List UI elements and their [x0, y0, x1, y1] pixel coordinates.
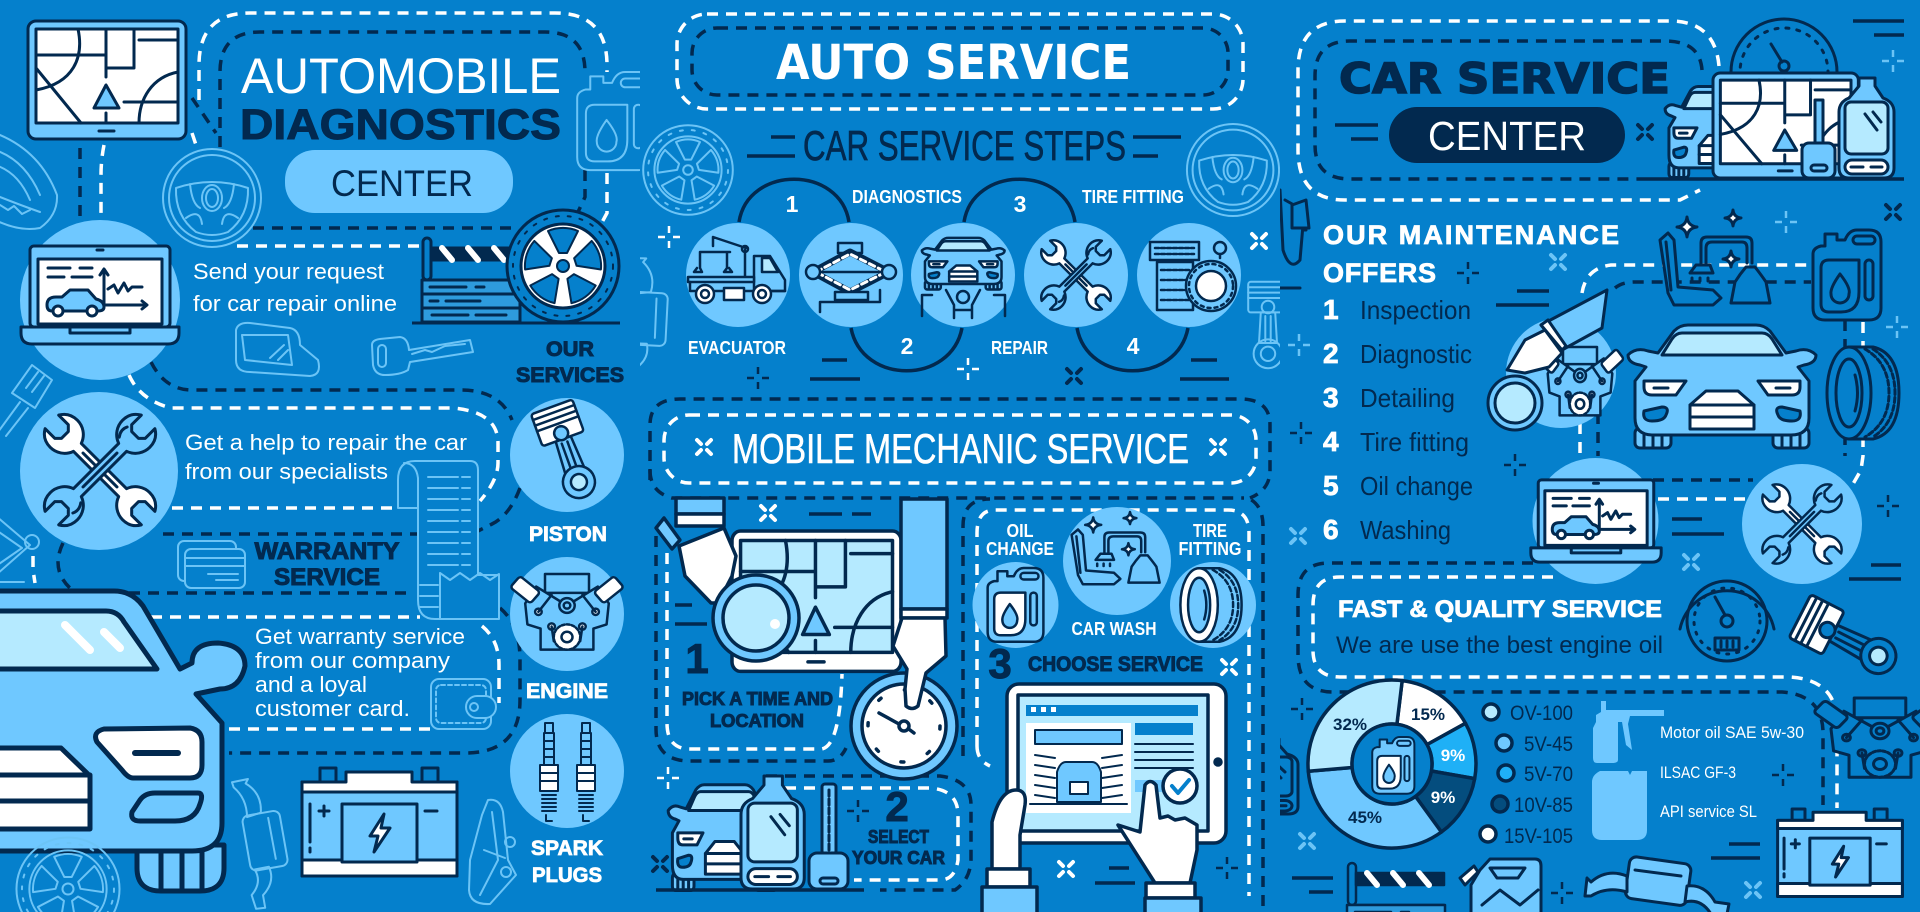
title: car service: CAR SERVICE — [1339, 54, 1670, 103]
icon: tire — [1827, 347, 1899, 439]
service: spark plugs: SPARK — [531, 837, 603, 860]
slice 15% — [1397, 681, 1466, 745]
title frame — [1298, 21, 1719, 200]
item 4: 4 — [1323, 426, 1339, 457]
option: oil change: CHANGE — [986, 539, 1054, 559]
step icon: tow truck — [686, 223, 790, 327]
title: auto service: AUTO SERVICE — [776, 35, 1131, 91]
item 2: 2 — [1323, 338, 1339, 369]
service: engine — [510, 557, 624, 703]
icon: receipt — [398, 461, 499, 619]
item 2: Diagnostic — [1360, 339, 1472, 369]
step 3 illustration: tablet and hands — [982, 684, 1226, 912]
outline steering wheel — [1187, 124, 1279, 216]
option: tire fitting: FITTING — [1178, 539, 1242, 559]
legend 10V-85 — [1492, 794, 1573, 817]
icon: fuel nozzle — [1280, 190, 1309, 288]
icon: car key outline — [372, 337, 473, 375]
legend 5V-45 — [1496, 733, 1573, 756]
item 3 — [1323, 382, 1455, 413]
icon: key outline left — [0, 365, 52, 436]
step 1 label: LOCATION — [710, 711, 804, 731]
item 1: Inspection — [1360, 295, 1471, 325]
lower dashed routes — [656, 498, 1263, 906]
value labels: 45% — [1348, 808, 1382, 827]
step 2 label: 2 — [885, 783, 909, 830]
icon: engine — [1813, 698, 1920, 777]
legend 15V-105: 15V-105 — [1504, 825, 1573, 848]
icon: battery — [1778, 809, 1902, 896]
icon: seat wash — [1660, 210, 1770, 305]
step 3 label: 3 — [988, 640, 1012, 687]
service: spark plugs: PLUGS — [532, 864, 602, 887]
heading: mobile mechanic service: MOBILE MECHANIC SERVICE — [732, 425, 1189, 472]
icon: oil can — [1593, 701, 1664, 763]
legend 5V-70 — [1498, 763, 1573, 786]
text: send request — [193, 259, 397, 316]
hand with magnifier — [656, 498, 799, 661]
value labels: 9% — [1441, 746, 1465, 765]
step connector arcs — [739, 179, 1188, 371]
text: oil specs: API service SL — [1660, 802, 1757, 821]
center pill — [285, 150, 513, 213]
text: warranty details: Get warranty service — [255, 624, 465, 649]
service: spark plugs — [510, 714, 624, 887]
clock — [851, 673, 957, 779]
step numbers — [786, 191, 1140, 359]
icon: piston — [1789, 594, 1905, 686]
legend — [1480, 702, 1573, 848]
icon cluster: gauge, car, tablet, device — [1637, 19, 1904, 179]
step 2 label — [852, 783, 945, 868]
step labels: EVACUATOR — [688, 338, 786, 358]
icon: wrenches circle — [20, 392, 178, 550]
icon: battery — [302, 768, 457, 876]
item 5: Oil change — [1360, 471, 1473, 501]
text: repair help: from our specialists — [185, 459, 388, 484]
legend 5V-70: 5V-70 — [1524, 763, 1573, 786]
step 1 illustration: tablet and hands — [656, 498, 957, 779]
outline muffler — [640, 257, 669, 366]
icon: alloy wheel outline — [16, 837, 120, 912]
heading: automobile: AUTOMOBILE — [241, 48, 561, 104]
icon: laptop circle — [1531, 458, 1661, 584]
service: piston — [510, 398, 624, 546]
value labels: 32% — [1333, 715, 1367, 734]
slice 9% dark — [1416, 771, 1475, 832]
panel: auto service — [616, 0, 1288, 912]
step 2 label: YOUR CAR — [852, 848, 945, 868]
donut chart — [1308, 680, 1476, 848]
icon: oil jug — [1592, 771, 1647, 840]
item 1: 1 — [1323, 294, 1339, 325]
step labels — [688, 187, 1184, 358]
icon: device partial — [1243, 739, 1298, 814]
list: maintenance offers — [1323, 294, 1473, 545]
heading: warranty service — [254, 542, 400, 586]
icon: jack outline — [0, 516, 39, 582]
icon: ramp — [1347, 863, 1445, 912]
option: car wash — [1063, 507, 1171, 639]
step 2 label: SELECT — [868, 827, 929, 847]
heading: car service steps — [747, 130, 1181, 161]
item 6 — [1323, 514, 1451, 545]
text: repair help — [185, 430, 467, 484]
text: warranty details — [255, 624, 465, 721]
text: send request: Send your request — [193, 259, 384, 284]
heading: our services — [516, 341, 624, 382]
step icon: tire stack — [1137, 223, 1241, 327]
text: oil specs: Motor oil SAE 5w-30 — [1660, 723, 1804, 742]
value labels — [1333, 705, 1465, 827]
service tablet — [1007, 684, 1226, 843]
text: send request: for car repair online — [193, 291, 397, 316]
speed lines — [1335, 125, 1378, 139]
mobile mechanic frame — [650, 399, 1270, 498]
value labels: 15% — [1411, 705, 1445, 724]
icon: wrenches circle — [1742, 464, 1862, 584]
step numbers: 2 — [901, 333, 913, 359]
legend OV-100 — [1483, 702, 1573, 725]
title frame — [677, 14, 1243, 109]
step numbers: 3 — [1014, 191, 1026, 217]
item 1 — [1323, 294, 1471, 325]
icon: side mirror outline — [236, 323, 319, 376]
slice 45% — [1308, 768, 1441, 848]
icon: ramp with wheel — [412, 210, 620, 323]
step 2 illustration: car, device and key — [656, 776, 864, 890]
item 6: Washing — [1360, 515, 1451, 545]
icon: jerrycan — [1460, 859, 1541, 912]
item 5 — [1323, 470, 1473, 501]
item 6: 6 — [1323, 514, 1339, 545]
step labels: TIRE FITTING — [1082, 187, 1184, 207]
left hand — [982, 790, 1037, 912]
heading: warranty service: WARRANTY — [254, 538, 400, 565]
icon: oil canister outline — [576, 71, 640, 172]
outline wheel — [643, 125, 733, 215]
icon: laptop circle — [20, 220, 180, 380]
service: piston: PISTON — [529, 523, 607, 546]
slice 9% bright — [1427, 723, 1476, 779]
heading: our maintenance offers: OUR MAINTENANCE — [1323, 220, 1619, 250]
step icon: car lift — [911, 223, 1015, 327]
icon: gauge — [1680, 581, 1774, 661]
legend 5V-45: 5V-45 — [1524, 733, 1573, 756]
legend 15V-105 — [1480, 825, 1573, 848]
option: tire fitting: TIRE — [1193, 521, 1227, 541]
icon: brake pad outline — [469, 800, 516, 904]
route dashes — [1580, 265, 1863, 499]
text: fast and quality service: We are use the best engine oil — [1336, 632, 1663, 659]
step 3 label — [988, 640, 1203, 687]
option: oil change: OIL — [1006, 521, 1034, 541]
heading: diagnostics: DIAGNOSTICS — [240, 101, 561, 149]
heading: car service steps: CAR SERVICE STEPS — [803, 122, 1126, 169]
heading: our services: OUR — [546, 338, 594, 361]
text: warranty details: from our company — [255, 648, 450, 673]
step icon: jack — [799, 223, 903, 327]
text: fast and quality service — [1336, 596, 1663, 659]
slice 32% — [1308, 680, 1402, 771]
center pill: CENTER — [331, 163, 473, 204]
right hand with check mark — [1118, 769, 1201, 912]
heading: warranty service: SERVICE — [274, 564, 380, 591]
icon: steering wheel — [163, 149, 261, 247]
map tablet — [732, 531, 901, 671]
icon: canister — [1813, 230, 1881, 320]
title — [241, 58, 560, 140]
center pill: CENTER — [1428, 113, 1586, 159]
item 2 — [1323, 338, 1472, 369]
option: tire fitting — [1170, 521, 1256, 648]
step 1 label — [682, 635, 833, 731]
heading: our maintenance offers — [1323, 220, 1619, 288]
step 1 label: 1 — [685, 635, 709, 682]
text: oil specs: ILSAC GF-3 — [1660, 763, 1736, 782]
icon: engine inspection — [1488, 290, 1624, 430]
donut hub canister — [1352, 724, 1432, 804]
heading: our maintenance offers: OFFERS — [1323, 258, 1436, 288]
item 3: Detailing — [1360, 383, 1455, 413]
text: warranty details: and a loyal — [255, 672, 367, 697]
pointing hand — [851, 499, 957, 779]
fast and quality frame — [1298, 563, 1837, 808]
icon: big car — [0, 591, 245, 891]
item 3: 3 — [1323, 382, 1339, 413]
icon: navigation tablet — [28, 21, 186, 139]
step 1 label: PICK A TIME AND — [682, 689, 833, 709]
icon: tire tread — [0, 133, 57, 229]
icon: wallet — [431, 679, 496, 729]
panel: automobile diagnostics center — [0, 13, 651, 912]
heading: our services: SERVICES — [516, 364, 624, 387]
text: warranty details: customer card. — [255, 696, 410, 721]
item 5: 5 — [1323, 470, 1339, 501]
text: repair help: Get a help to repair the car — [185, 430, 467, 455]
text: oil specs — [1660, 723, 1804, 821]
outline piston — [1248, 282, 1288, 368]
dashed route lines — [33, 13, 607, 753]
value labels: 9% — [1431, 788, 1455, 807]
step labels: DIAGNOSTICS — [852, 187, 962, 207]
icon: muffler — [1585, 856, 1729, 912]
icon: muffler outline — [231, 778, 288, 910]
option: oil change — [972, 521, 1058, 648]
text: fast and quality service: FAST & QUALITY SERVICE — [1338, 596, 1662, 623]
step labels: REPAIR — [991, 338, 1048, 358]
icon: car — [1628, 325, 1816, 448]
item 4: Tire fitting — [1360, 427, 1469, 457]
option: car wash: CAR WASH — [1072, 619, 1156, 639]
legend 10V-85: 10V-85 — [1514, 794, 1573, 817]
service: engine: ENGINE — [526, 680, 608, 703]
step numbers: 4 — [1127, 333, 1140, 359]
decorative sparks and speed lines — [653, 21, 1908, 904]
legend OV-100: OV-100 — [1510, 702, 1573, 725]
panel: car service center — [1243, 0, 1920, 912]
step 3 label: CHOOSE SERVICE — [1028, 653, 1203, 676]
step numbers: 1 — [786, 191, 799, 217]
step icon: wrenches — [1024, 223, 1128, 327]
center pill — [1389, 107, 1625, 163]
icon: payment cards — [178, 541, 245, 588]
